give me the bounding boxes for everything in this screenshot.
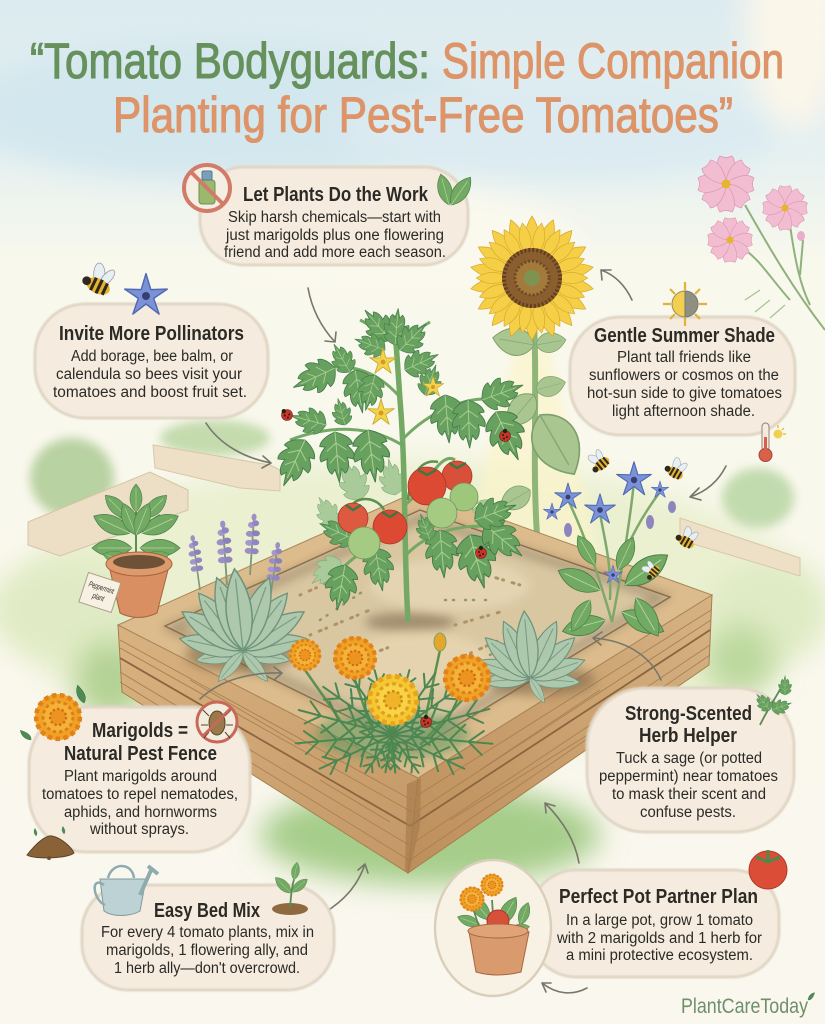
heading: Natural Pest Fence: [64, 743, 217, 765]
garden background beds and grass: [0, 420, 825, 885]
body text: just marigolds plus one flowering: [225, 227, 444, 244]
icon: watering can: [95, 866, 158, 916]
body text: peppermint) near tomatoes: [599, 768, 778, 785]
body text: without sprays.: [89, 821, 189, 838]
icon: soil pile: [27, 826, 74, 860]
icon: no chemicals: [184, 165, 230, 211]
body text: Plant tall friends like: [617, 349, 751, 366]
body text: tomatoes and boost fruit set.: [53, 384, 247, 401]
panel: invite more pollinators: [35, 257, 268, 418]
panel: perfect pot partner plan: [435, 850, 787, 996]
icon: thermometer: [759, 423, 786, 462]
body text: a mini protective ecosystem.: [566, 947, 753, 964]
body text: For every 4 tomato plants, mix in: [101, 924, 314, 941]
panel: strong-scented herb helper: [587, 676, 794, 832]
body text: [101, 924, 314, 977]
sage and lavender, left: [176, 513, 310, 685]
body text: [556, 912, 762, 964]
title: Planting for Pest-Free Tomatoes”: [113, 87, 733, 143]
plant tag: plant: [91, 591, 106, 604]
body text: Skip harsh chemicals—start with: [228, 209, 441, 226]
body text: [42, 768, 238, 838]
body text: Plant marigolds around: [64, 768, 217, 785]
heading: [64, 720, 217, 765]
body text: calendula so bees visit your: [56, 366, 242, 383]
body text: [587, 349, 782, 420]
body text: Add borage, bee balm, or: [71, 348, 233, 365]
body text: friend and add more each season.: [224, 244, 446, 261]
plant tag: Peppermint: [88, 579, 116, 596]
title: “Tomato Bodyguards:: [30, 33, 430, 89]
heading: [625, 703, 752, 747]
sage, right: [475, 610, 588, 705]
body text: aphids, and hornworms: [64, 804, 217, 821]
icon: small leaves: [19, 684, 87, 742]
body text: marigolds, 1 flowering ally, and: [106, 942, 308, 959]
heading: Marigolds =: [92, 720, 188, 742]
body text: with 2 marigolds and 1 herb for: [556, 930, 762, 947]
marigolds in bed: [289, 633, 494, 783]
icon: bee: [80, 257, 119, 298]
cosmos flowers, top right: [698, 156, 825, 330]
icon: sprout: [272, 862, 310, 915]
heading: Strong-Scented: [625, 703, 752, 725]
heading: Gentle Summer Shade: [594, 325, 775, 347]
plant tag: [79, 572, 121, 612]
borage plant and bees: [543, 446, 701, 641]
heading: Herb Helper: [639, 725, 737, 747]
heading: Invite More Pollinators: [59, 323, 244, 345]
icon: borage flower: [125, 274, 167, 314]
body text: Tuck a sage (or potted: [616, 750, 762, 767]
icon: green leaf: [434, 172, 477, 209]
body text: light afternoon shade.: [612, 403, 755, 420]
heading: Easy Bed Mix: [154, 900, 260, 922]
body text: hot-sun side to give tomatoes: [587, 385, 782, 402]
heading: Let Plants Do the Work: [243, 184, 429, 206]
title: [30, 33, 784, 143]
body text: 1 herb ally—don't overcrowd.: [114, 960, 300, 977]
icon: sun and shade: [663, 282, 707, 326]
sunflower: [462, 216, 600, 560]
pot illustration circle: [435, 860, 551, 996]
icon: no pests: [197, 702, 237, 742]
panel: gentle summer shade: [570, 282, 795, 462]
icon: marigold: [35, 694, 81, 740]
tomatoes: [338, 461, 478, 559]
arrows: [200, 270, 726, 993]
body text: [599, 750, 778, 821]
heading: Perfect Pot Partner Plan: [559, 886, 758, 908]
panel: easy bed mix: [82, 862, 334, 990]
body text: confuse pests.: [640, 804, 736, 821]
potted peppermint: [79, 484, 182, 618]
raised garden bed: [118, 490, 712, 873]
body text: sunflowers or cosmos on the: [589, 367, 779, 384]
icon: tomato: [749, 850, 787, 889]
tomato plant: [268, 302, 535, 620]
panel: let plants do the work: [184, 165, 477, 265]
body text: tomatoes to repel nematodes,: [42, 786, 238, 803]
body text: to mask their scent and: [612, 786, 766, 803]
body text: [53, 348, 247, 401]
body text: [224, 209, 446, 261]
panel: marigolds natural pest fence: [19, 684, 250, 860]
icon: herb sprig: [751, 676, 794, 725]
body text: In a large pot, grow 1 tomato: [566, 912, 753, 929]
